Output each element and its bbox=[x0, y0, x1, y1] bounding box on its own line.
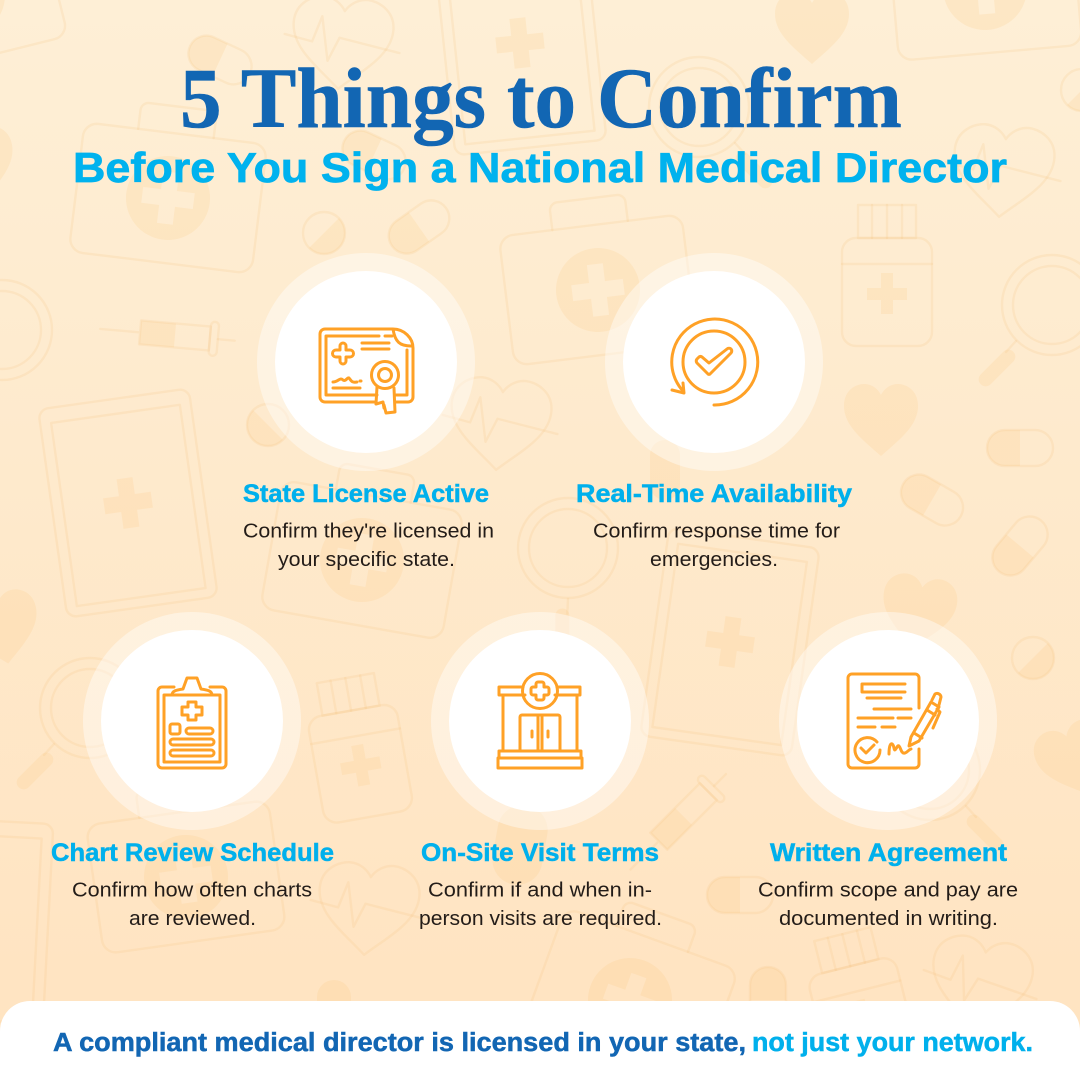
description bbox=[72, 880, 312, 930]
heading: Chart Review Schedule bbox=[51, 839, 334, 867]
heading: On-Site Visit Terms bbox=[421, 839, 659, 867]
description: your specific state. bbox=[278, 549, 455, 571]
description: Confirm they're licensed in bbox=[243, 520, 494, 542]
footer text: not just your network. bbox=[752, 1029, 1033, 1057]
description: Confirm if and when in- bbox=[428, 880, 652, 902]
footer text bbox=[53, 1029, 1033, 1057]
item: state license active bbox=[243, 253, 494, 571]
heading: Real-Time Availability bbox=[576, 480, 852, 508]
icon circle: certificate bbox=[257, 253, 475, 471]
description: emergencies. bbox=[650, 549, 778, 571]
icon circle: clinic bbox=[431, 612, 649, 830]
description: person visits are required. bbox=[419, 908, 662, 930]
item: written agreement bbox=[758, 612, 1018, 930]
description: Confirm response time for bbox=[593, 520, 840, 542]
description: Confirm scope and pay are bbox=[758, 880, 1018, 902]
subtitle: Before You Sign a National Medical Director bbox=[73, 144, 1007, 191]
title: 5 Things to Confirm bbox=[180, 50, 902, 146]
description bbox=[419, 880, 662, 930]
footer bar bbox=[0, 1001, 1080, 1080]
description: documented in writing. bbox=[779, 908, 998, 930]
item: real-time availability bbox=[576, 253, 852, 571]
icon circle: check cycle bbox=[605, 253, 823, 471]
icon circle: signed document bbox=[779, 612, 997, 830]
description bbox=[593, 520, 840, 571]
heading: State License Active bbox=[243, 480, 489, 508]
description bbox=[243, 520, 494, 571]
item: on-site visit terms bbox=[419, 612, 662, 930]
description: are reviewed. bbox=[129, 908, 256, 930]
description bbox=[758, 880, 1018, 930]
item: chart review schedule bbox=[51, 612, 334, 930]
heading: Written Agreement bbox=[770, 839, 1008, 867]
footer text: A compliant medical director is licensed in your state, bbox=[53, 1029, 746, 1057]
icon circle: clipboard bbox=[83, 612, 301, 830]
description: Confirm how often charts bbox=[72, 880, 312, 902]
